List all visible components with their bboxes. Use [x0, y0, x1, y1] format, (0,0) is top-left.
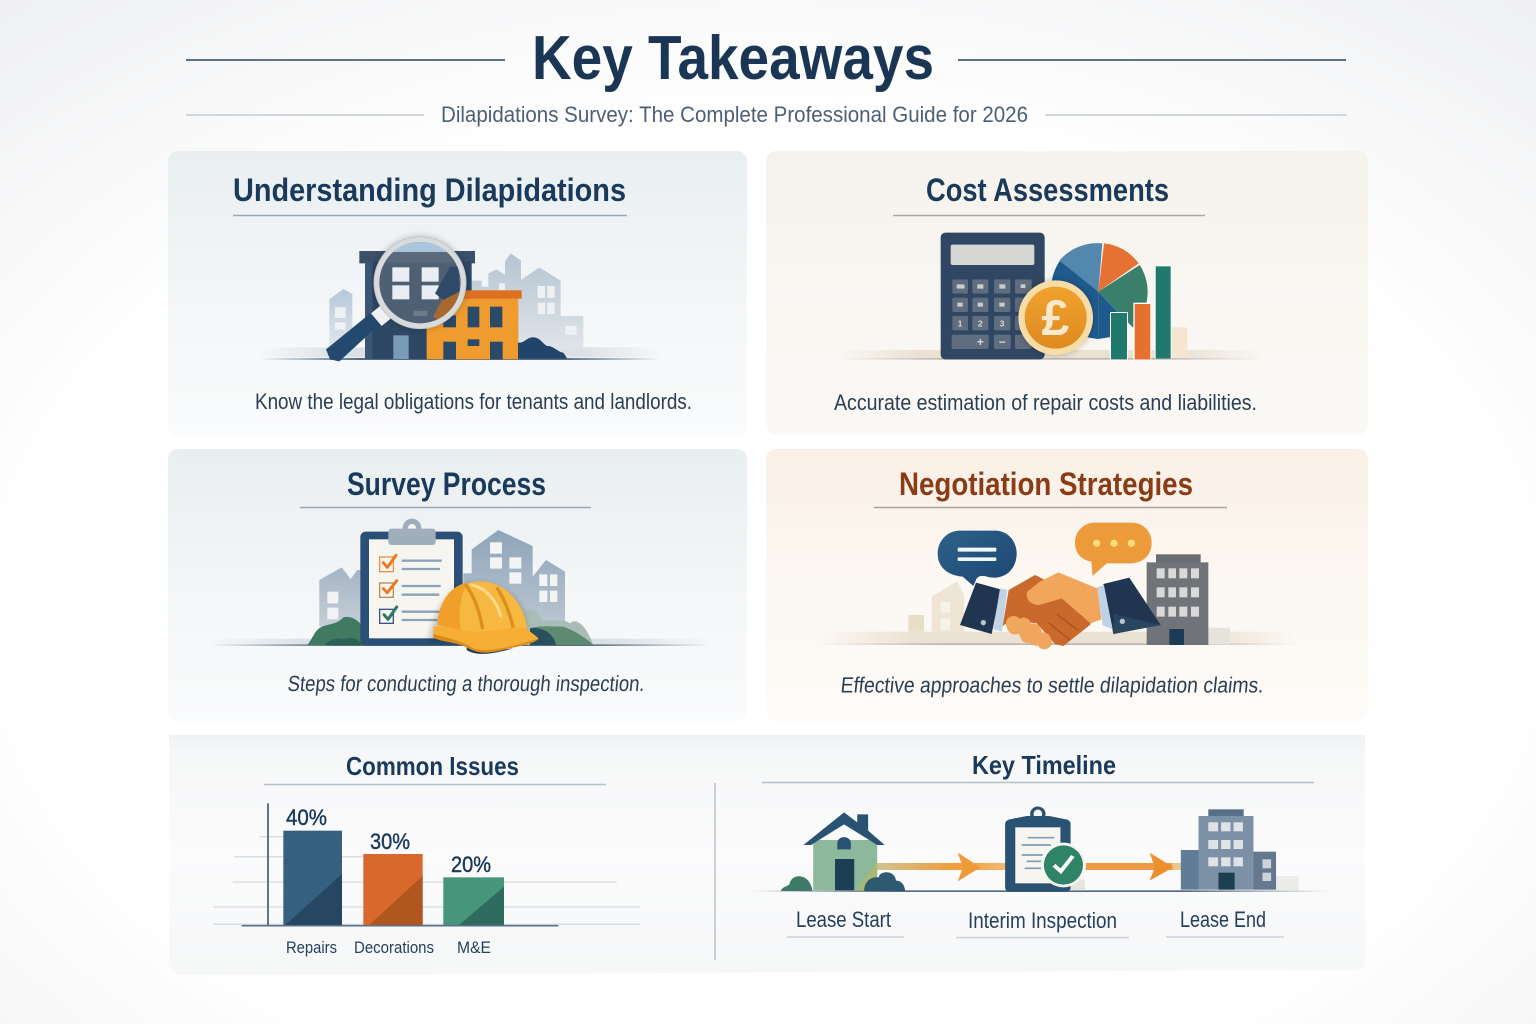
heading: negotiation strategies: Negotiation Strategies: [899, 466, 1193, 502]
bar charts: [1110, 265, 1187, 359]
timeline: lease start to lease end: [750, 808, 1329, 938]
pound coin: £: [1041, 290, 1069, 346]
bar chart: common issues: 40%: [286, 805, 327, 830]
description: Steps for conducting a thorough inspection.: [286, 671, 646, 696]
icon: calculator, coin and charts: [837, 233, 1263, 360]
calculator: [941, 233, 1045, 359]
panel: negotiation strategies: [766, 449, 1368, 721]
office building: [1147, 554, 1208, 645]
icon: handshake with speech bubbles: [817, 523, 1300, 651]
description: Accurate estimation of repair costs and liabilities.: [834, 390, 1257, 415]
timeline: lease start to lease end: Lease End: [1180, 907, 1266, 932]
arrow: interim inspection to lease end: [1083, 853, 1183, 881]
icon: house: [781, 812, 905, 891]
bar chart: common issues: Decorations: [354, 938, 434, 957]
heading: key timeline: Key Timeline: [972, 750, 1116, 780]
heading: cost assessments: Cost Assessments: [926, 172, 1169, 208]
arrow: lease start to interim inspection: [877, 853, 1007, 881]
description: Effective approaches to settle dilapidation claims.: [839, 673, 1265, 697]
icon: magnifier over buildings: [260, 235, 660, 361]
bar chart: common issues: [213, 803, 640, 957]
calculator: −: [999, 335, 1006, 349]
bar chart: common issues: 20%: [451, 852, 491, 877]
bar chart: common issues: Repairs: [286, 938, 337, 957]
timeline: lease start to lease end: Interim Inspection: [968, 908, 1117, 933]
calculator: 3: [1000, 318, 1005, 328]
hard hat: [428, 581, 539, 654]
subtitle: Dilapidations Survey: The Complete Professional Guide for 2026: [441, 102, 1028, 127]
clipboard: [360, 519, 463, 645]
calculator: 1: [958, 318, 963, 328]
panel: common issues and key timeline: [169, 735, 1365, 975]
heading: common issues: Common Issues: [346, 751, 519, 781]
speech bubble: orange: [1075, 523, 1152, 576]
calculator: 2: [978, 318, 983, 328]
bar chart: common issues: M&E: [457, 938, 491, 957]
calculator: +: [977, 335, 984, 349]
heading: understanding dilapidations: Understanding Dilapidations: [233, 172, 626, 208]
title: Key Takeaways: [532, 24, 934, 93]
pie chart: [1051, 243, 1148, 339]
icon: clipboard with check: [1005, 808, 1086, 892]
handshake: [960, 572, 1161, 651]
icon: clipboard, hard hat and buildings: [210, 519, 710, 654]
bar chart: common issues: 30%: [370, 829, 410, 854]
panel: survey process: [168, 449, 747, 721]
speech bubble: blue: [938, 531, 1017, 586]
panel: understanding dilapidations: [168, 151, 747, 435]
pound coin: [1017, 279, 1094, 356]
panel: cost assessments: [766, 151, 1368, 435]
heading: survey process: Survey Process: [347, 466, 546, 502]
timeline: lease start to lease end: Lease Start: [796, 907, 891, 932]
icon: office block: [1181, 809, 1276, 890]
description: Know the legal obligations for tenants and landlords.: [255, 389, 692, 414]
